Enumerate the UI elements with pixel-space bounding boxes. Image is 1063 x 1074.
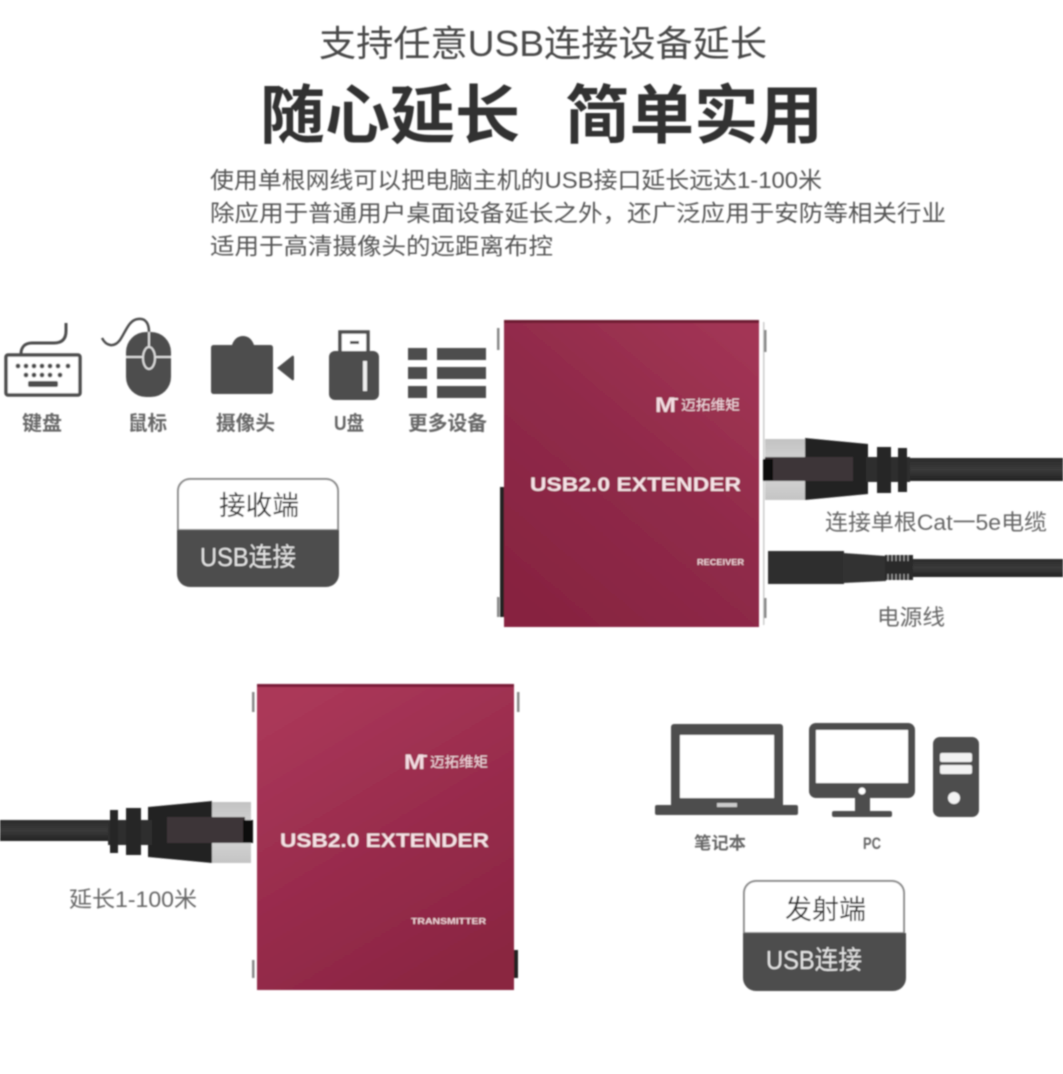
cable: network connector receiver <box>763 438 1063 500</box>
product name: USB2.0 EXTENDER <box>280 831 489 852</box>
icon: computer tower <box>933 737 979 817</box>
badge: receiver: USB连接 <box>200 542 296 572</box>
badge: receiver <box>177 479 339 587</box>
badge: transmitter: USB连接 <box>766 945 862 975</box>
device: receiver box <box>497 320 766 627</box>
labels: receiver device names: 键盘 <box>22 412 62 435</box>
logo <box>655 394 740 417</box>
labels: receiver device names: 鼠标 <box>128 412 167 435</box>
device: transmitter box <box>252 684 520 990</box>
text block: description: 使用单根网线可以把电脑主机的USB接口延长远达1-100米 <box>210 167 822 193</box>
title: main heading <box>260 80 823 152</box>
labels: receiver device names <box>22 412 487 435</box>
model label: TRANSMITTER <box>411 917 486 926</box>
icon: usb drive <box>329 332 379 400</box>
cable: network connector transmitter <box>0 801 253 863</box>
title: main heading: 简单实用 <box>565 80 823 152</box>
icon: desktop monitor <box>809 723 915 817</box>
labels: receiver device names: U盘 <box>334 412 364 435</box>
labels: transmitter device names: 笔记本 <box>694 833 746 853</box>
logo: M <box>655 394 676 417</box>
badge: receiver: 接收端 <box>219 491 299 521</box>
labels: receiver device names: 更多设备 <box>408 412 487 435</box>
title: subtitle line: 支持任意USB连接设备延长 <box>319 23 767 64</box>
badge: transmitter <box>743 881 906 991</box>
logo: 迈拓维矩 <box>681 397 740 413</box>
icon: keyboard <box>6 323 80 395</box>
labels: transmitter device names <box>694 833 881 853</box>
badge: transmitter: 发射端 <box>785 895 866 925</box>
icon: camera <box>211 336 294 394</box>
icon: laptop <box>655 724 798 815</box>
text block: description: 适用于高清摄像头的远距离布控 <box>210 233 553 259</box>
title: main heading: 随心延长 <box>260 80 520 152</box>
text block: description <box>210 167 946 259</box>
label: power cable: 电源线 <box>877 605 945 630</box>
icon: more devices list <box>408 348 486 398</box>
labels: receiver device names: 摄像头 <box>216 412 275 435</box>
panel: receiver devices <box>6 319 486 400</box>
label: extension distance: 延长1-100米 <box>69 887 197 912</box>
panel: transmitter devices <box>655 723 979 817</box>
labels: transmitter device names: PC <box>863 834 881 853</box>
product name: USB2.0 EXTENDER <box>530 475 741 496</box>
label: cat5e cable: 连接单根Cat一5e电缆 <box>825 510 1047 535</box>
logo: 迈拓维矩 <box>430 754 488 770</box>
model label: RECEIVER <box>697 558 744 567</box>
logo: M <box>404 751 425 774</box>
cable: power connector <box>768 551 1063 584</box>
text block: description: 除应用于普通用户桌面设备延长之外，还广泛应用于安防等相关行业 <box>210 200 946 226</box>
icon: mouse <box>102 319 171 397</box>
logo <box>404 751 488 774</box>
